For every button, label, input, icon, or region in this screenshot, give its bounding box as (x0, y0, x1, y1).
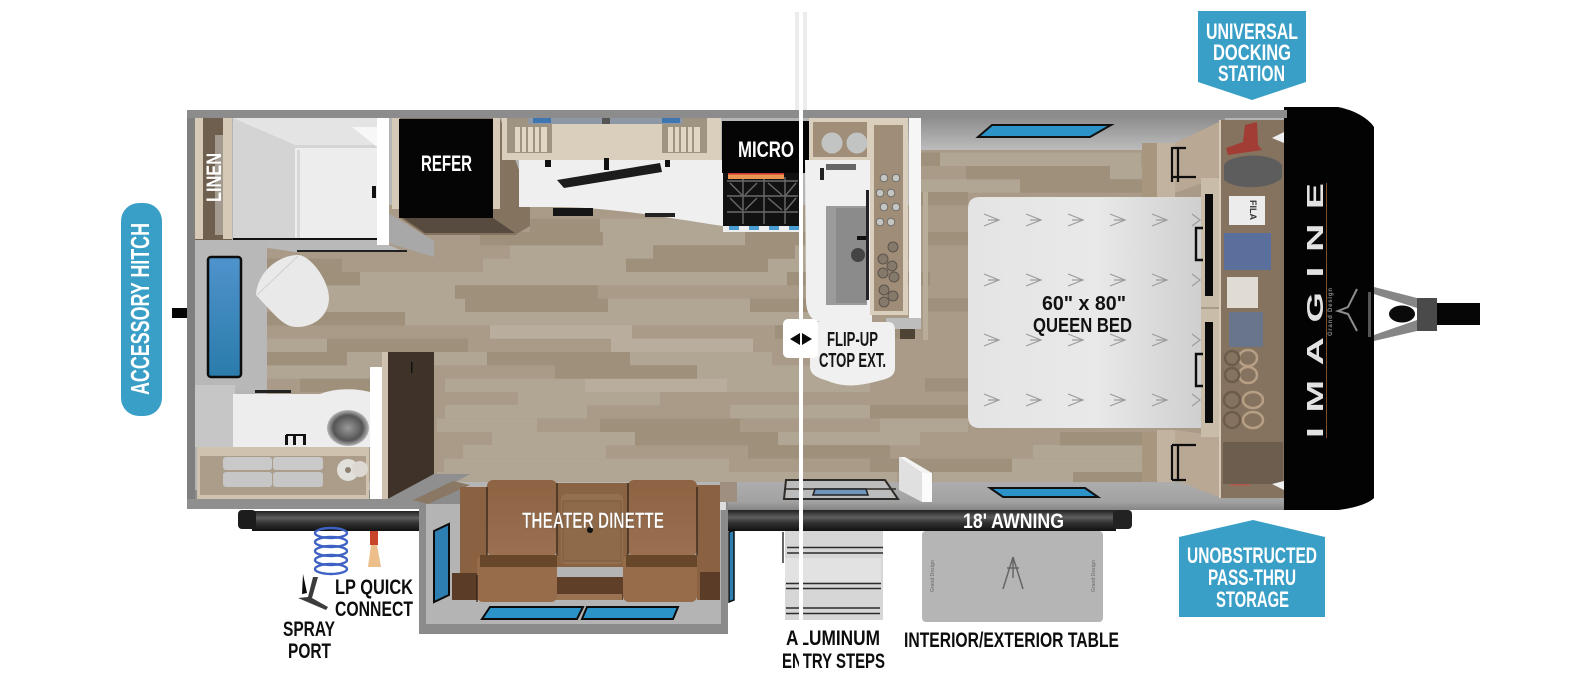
label: spray port (283, 618, 335, 663)
icon: lp quick connect (368, 531, 381, 567)
callout: accessory hitch: ACCESSORY HITCH (125, 223, 155, 395)
panel: kitchen sink counter (805, 118, 928, 340)
storage books left (515, 127, 547, 152)
icon: slide direction arrows (783, 319, 818, 358)
wood plank floor (267, 150, 1221, 482)
slide window right (729, 530, 734, 602)
front cap with logo (1284, 107, 1374, 510)
left wall and bottom wall (187, 110, 1287, 509)
vanity storage (197, 447, 369, 499)
storage item: white shirt: FILA (1248, 200, 1258, 220)
entry door mat (784, 480, 898, 499)
callout: accessory hitch (121, 203, 162, 416)
awning (238, 510, 1132, 533)
label: bed size: 60" x 80" (1042, 293, 1126, 315)
panel: theater dinette slide-out (382, 474, 737, 634)
storage item: white shirt (1229, 196, 1265, 225)
label: countertop extension: CTOP EXT. (819, 350, 886, 372)
storage item: towels (1227, 277, 1258, 308)
panel: pass-thru storage (1221, 120, 1284, 498)
label: refer: REFER (421, 151, 472, 176)
trailer shell (187, 110, 1288, 510)
slide line divider (795, 12, 807, 670)
label: micro: MICRO (738, 137, 794, 162)
ceiling window bedroom rear (990, 488, 1098, 497)
aluminum steps (783, 531, 883, 620)
interior/exterior table: Grand Design (930, 560, 936, 592)
callout: unobstructed pass-thru storage (1179, 520, 1325, 617)
panel: flip-up countertop extension (810, 322, 895, 385)
label: aluminum entry steps: ALUMINUM (786, 627, 880, 650)
logo: chevron emblem: Grand Design (1328, 288, 1334, 336)
panel: bedside cabinets (1142, 120, 1221, 498)
callout: unobstructed pass-thru storage: STORAGE (1216, 587, 1289, 612)
label: lp quick connect: CONNECT (335, 598, 413, 621)
storage item: shoes (1224, 350, 1263, 428)
storage items: red bag and duffel (1224, 122, 1284, 187)
interior/exterior table: Grand Design (1091, 560, 1097, 592)
bath counter and sink (233, 389, 370, 447)
rear accessory hitch tab (172, 308, 187, 318)
label: flip-up: FLIP-UP (827, 329, 878, 351)
label: lp quick connect (335, 576, 413, 621)
bed chevron pattern (984, 214, 1200, 406)
hitch tongue (1374, 287, 1480, 341)
callout: unobstructed pass-thru storage: UNOBSTRUCTED (1187, 543, 1317, 568)
callout: universal docking station: DOCKING (1213, 40, 1291, 65)
label: lp quick connect: LP QUICK (335, 576, 413, 599)
panel: refrigerator (392, 118, 530, 235)
label: aluminum entry steps (782, 627, 885, 673)
slide skylights (482, 607, 678, 619)
label: aluminum entry steps: ENTRY STEPS (782, 650, 885, 673)
label: awning length: 18' AWNING (963, 510, 1064, 533)
panel: shower (215, 118, 434, 257)
callout: unobstructed pass-thru storage: PASS-THRU (1208, 565, 1296, 590)
storage item: jeans (1224, 233, 1271, 270)
label: interior/exterior table: INTERIOR/EXTERIOR TABLE (904, 629, 1119, 652)
callout: universal docking station (1198, 11, 1306, 100)
bath partition and door (370, 352, 434, 502)
panel: linen cabinet (195, 118, 232, 240)
panel: queen bed (968, 197, 1201, 428)
storage item: folded shirt (1229, 312, 1263, 347)
storage item: tools (1223, 442, 1284, 490)
door stub wall (899, 457, 932, 502)
toilet (256, 255, 329, 327)
logo: chevron emblem (1328, 288, 1371, 337)
label: queen bed: QUEEN BED (1033, 315, 1132, 337)
icon: spray port hose (298, 528, 347, 610)
slide window left (434, 524, 449, 602)
logo: imagine wordmark: IMAGINE (1302, 183, 1328, 438)
label: spray port: SPRAY (283, 618, 335, 641)
panel: kitchen counter with overhead cabinet (502, 115, 723, 226)
window (208, 257, 241, 377)
interior/exterior table (922, 531, 1103, 622)
ceiling window bedroom front (978, 125, 1111, 137)
label: spray port: PORT (288, 640, 331, 663)
panel: microwave and stove (722, 121, 813, 232)
callout: universal docking station: STATION (1218, 61, 1285, 86)
label: linen: LINEN (203, 153, 226, 202)
logo on table (1003, 557, 1023, 589)
callout: universal docking station: UNIVERSAL (1206, 19, 1298, 44)
theater seating (452, 480, 720, 602)
label: theater dinette: THEATER DINETTE (522, 508, 664, 533)
panel: bathroom (195, 240, 434, 502)
storage books right (668, 127, 700, 152)
